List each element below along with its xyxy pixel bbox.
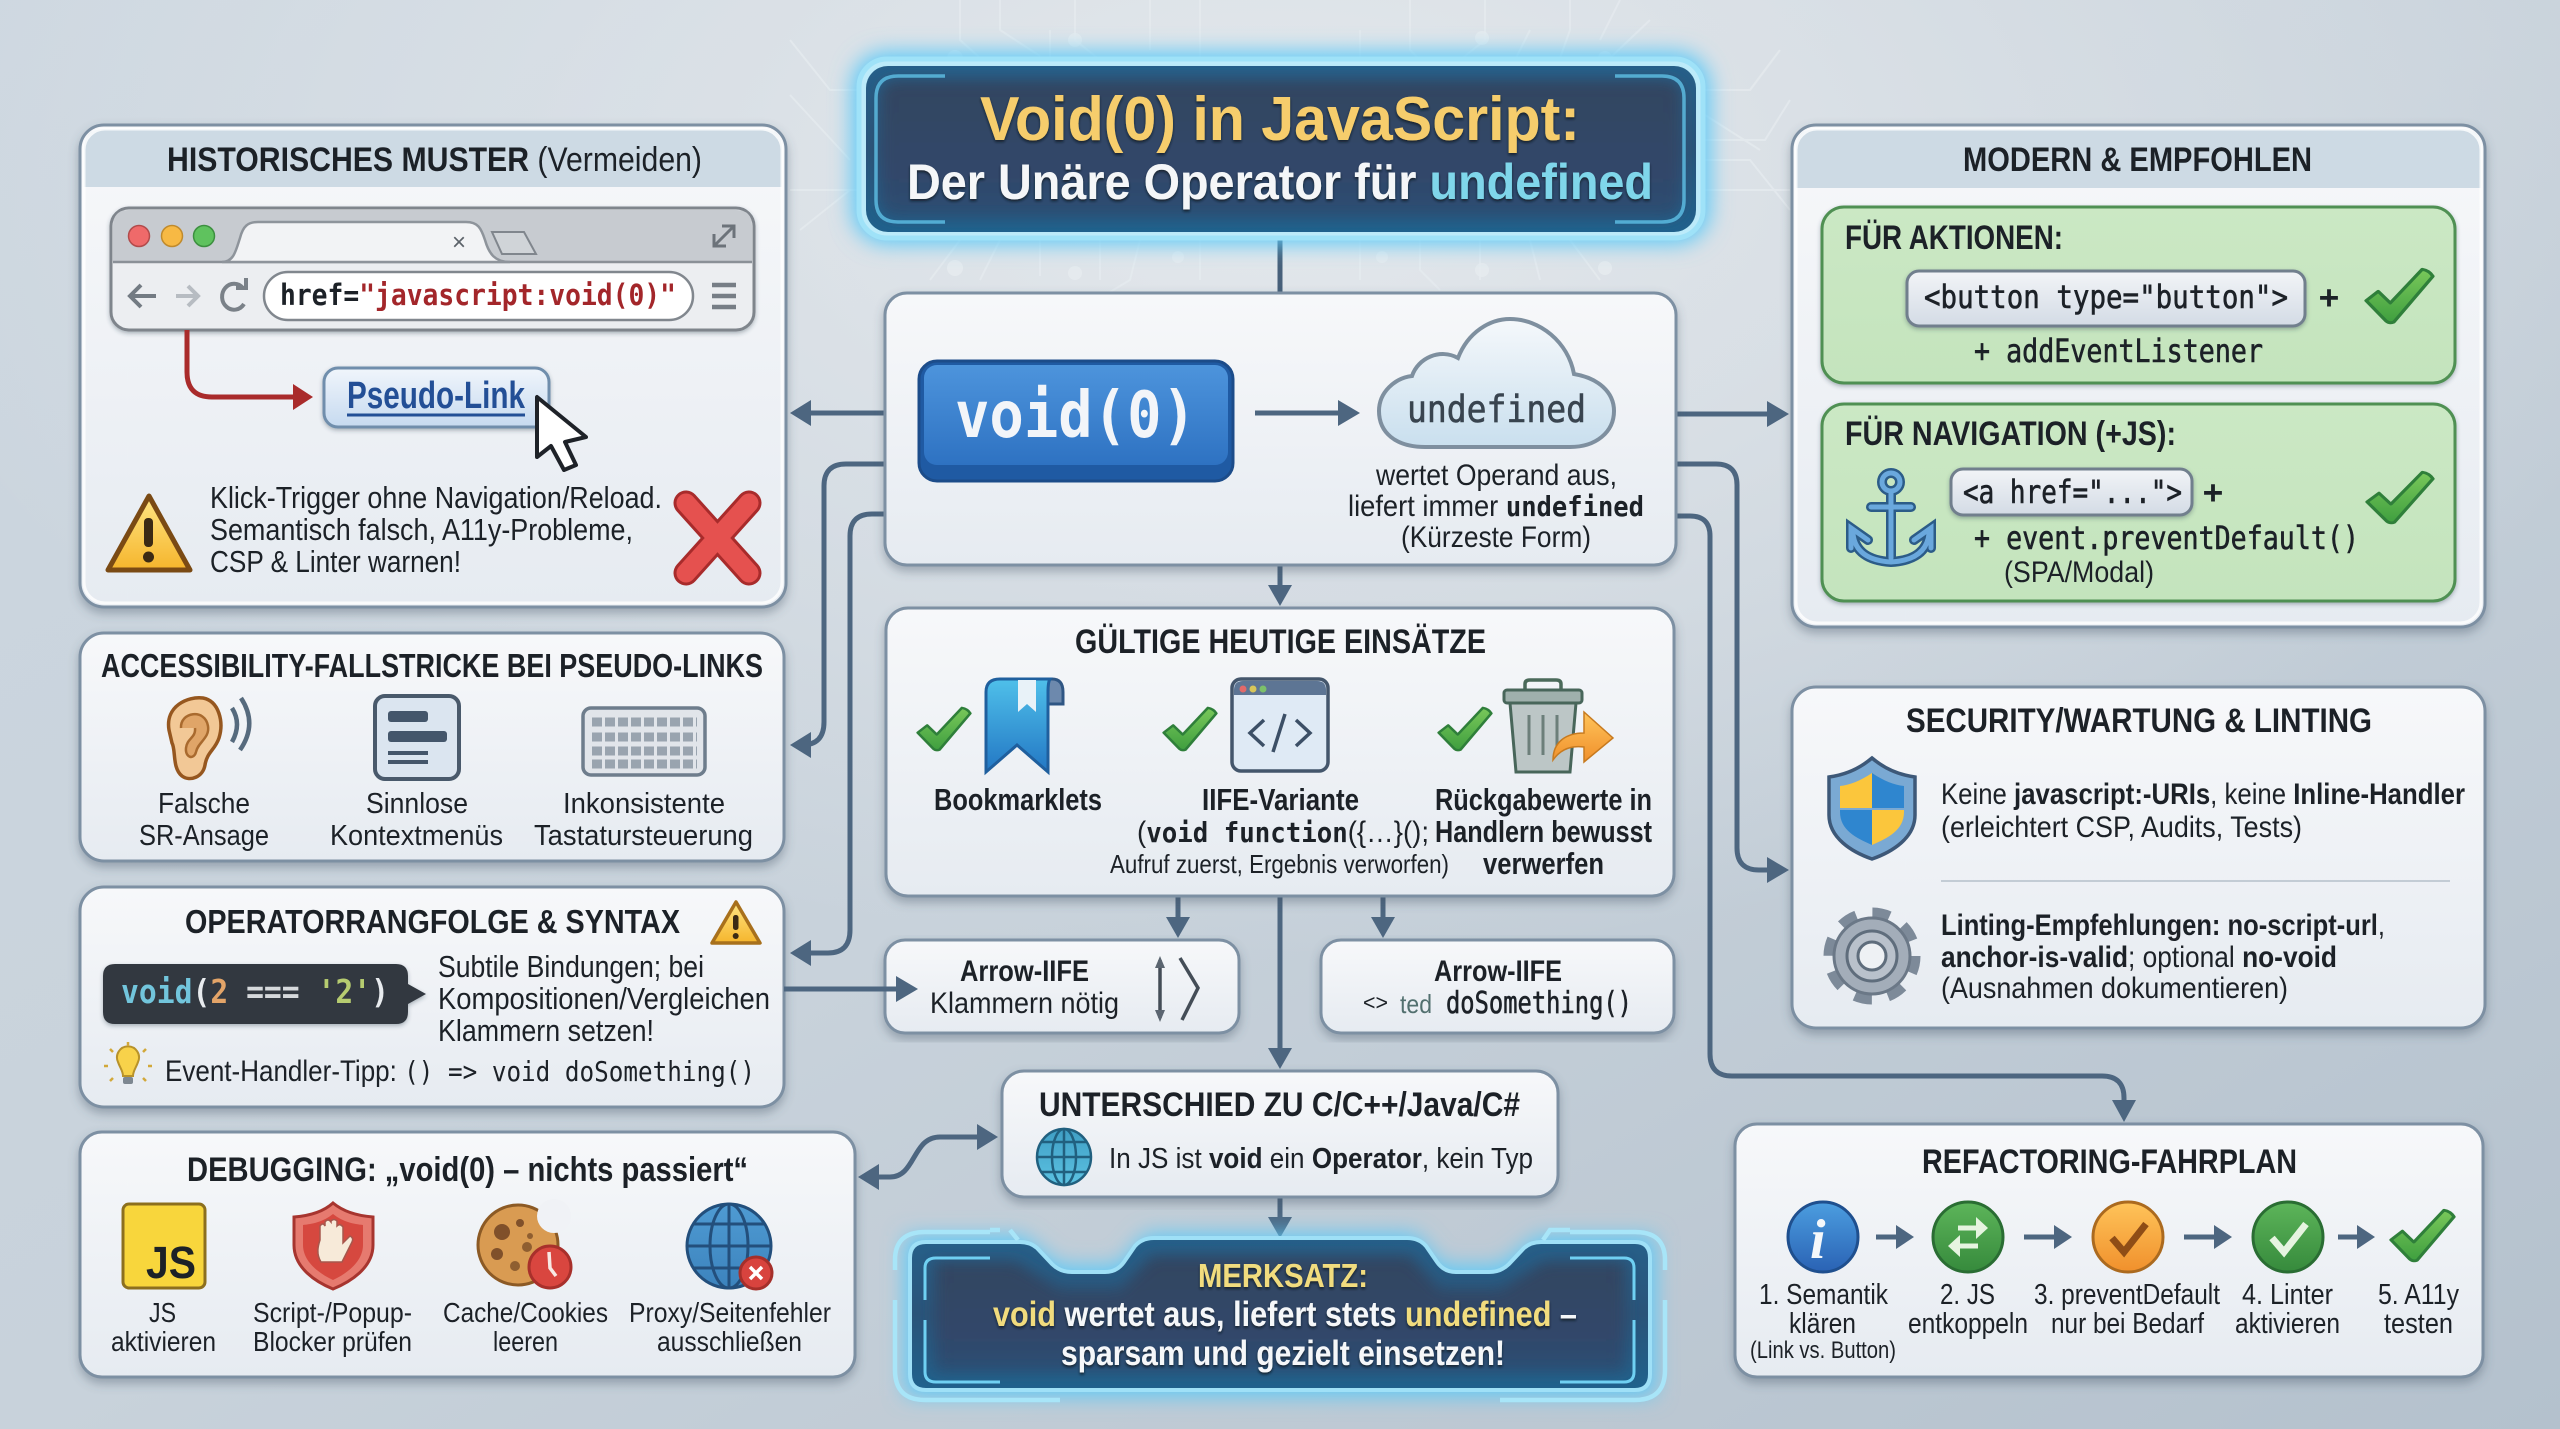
labels: aktivieren <box>111 1326 216 1357</box>
connector: core to valid uses <box>1268 565 1292 606</box>
connector: operator precedence to arrow iife <box>784 976 918 1002</box>
icon: light bulb <box>104 1042 152 1084</box>
panel: arrow iife right: <> <box>1363 990 1388 1015</box>
panel: arrow iife left <box>885 940 1239 1033</box>
labels: Proxy/Seitenfehler <box>629 1297 831 1328</box>
step labels: 3. preventDefault <box>2034 1279 2220 1311</box>
connector: core to refactoring <box>1676 516 2136 1122</box>
panel: historical pattern <box>80 125 786 607</box>
icon: blocker shield <box>294 1203 373 1289</box>
heading: DEBUGGING: „void(0) – nichts passiert“ <box>187 1151 748 1189</box>
warning text: Semantisch falsch, A11y-Probleme, <box>210 512 633 547</box>
panel: refactoring <box>1735 1124 2483 1377</box>
connector: valid uses to arrow iife left <box>1166 896 1190 938</box>
browser window: × <box>452 229 466 256</box>
green box: actions: FÜR AKTIONEN: <box>1845 219 2063 257</box>
icon: red cross <box>686 503 749 573</box>
panel: arrow iife right <box>1321 940 1674 1033</box>
pseudo-link button: Pseudo-Link <box>347 375 526 417</box>
security text: Keine javascript:-URIs, keine Inline-Handler <box>1941 778 2465 811</box>
connector: title to core <box>1278 238 1282 294</box>
icon: check 2 <box>1164 708 1216 750</box>
heading: HISTORISCHES MUSTER (Vermeiden) <box>167 141 702 179</box>
heading: ACCESSIBILITY-FALLSTRICKE BEI PSEUDO-LINKS <box>101 647 763 684</box>
void button <box>919 361 1233 481</box>
icon: keyboard <box>583 708 705 775</box>
connector: core to modern <box>1676 401 1789 427</box>
step labels: nur bei Bedarf <box>2051 1308 2205 1340</box>
labels: Blocker prüfen <box>253 1326 412 1357</box>
step labels: 2. JS <box>1940 1279 1995 1311</box>
step labels: entkoppeln <box>1908 1308 2028 1340</box>
labels: Script-/Popup- <box>253 1297 412 1328</box>
linting text <box>1941 909 2385 1005</box>
connector: comparison to merksatz <box>1268 1197 1292 1238</box>
panel: comparison <box>1002 1071 1558 1197</box>
connector: core to operator precedence <box>790 514 886 966</box>
icon: ear <box>169 698 249 779</box>
anchor code: <a href="..."> <box>1963 473 2182 511</box>
step 1 icon <box>1788 1202 1858 1272</box>
security text: (erleichtert CSP, Audits, Tests) <box>1941 811 2302 844</box>
labels <box>111 1297 831 1357</box>
red arrow <box>187 330 313 410</box>
core description: liefert immer undefined <box>1348 490 1644 523</box>
cloud undefined: undefined <box>1407 388 1586 431</box>
step arrow <box>2338 1225 2375 1249</box>
use labels: (void function({…}(); <box>1137 816 1429 849</box>
icon: shield <box>1829 758 1915 859</box>
code bubble <box>103 964 426 1024</box>
event handler tip: Event-Handler-Tipp: () => void doSomething() <box>165 1055 755 1088</box>
labels: Falsche <box>158 788 250 820</box>
icon: check <box>2367 472 2433 523</box>
panel: operator precedence <box>80 887 784 1107</box>
title line 1: Void(0) in JavaScript: <box>980 85 1580 154</box>
arrow to undefined <box>1255 400 1360 426</box>
step 5 icon <box>2391 1210 2454 1261</box>
icon: anchor <box>1851 473 1931 562</box>
panel: merksatz: void wertet aus, liefert stets undefined – <box>993 1295 1577 1334</box>
icon: globe with error <box>687 1204 772 1289</box>
panel: arrow iife left: Arrow-IIFE <box>960 955 1089 988</box>
icon: code window <box>1232 679 1328 771</box>
linting text: anchor-is-valid; optional no-void <box>1941 941 2337 974</box>
heading: REFACTORING-FAHRPLAN <box>1922 1143 2297 1181</box>
side text: Subtile Bindungen; bei <box>438 949 704 984</box>
panel: arrow iife right: doSomething() <box>1446 986 1632 1021</box>
icon: cookie <box>478 1199 571 1288</box>
icon: js: JS <box>146 1237 196 1288</box>
green box: navigation: (SPA/Modal) <box>2004 556 2154 589</box>
icon: js <box>123 1204 205 1288</box>
void button: void(0) <box>955 379 1196 453</box>
icon: parentheses <box>1155 956 1198 1022</box>
connector: valid uses to arrow iife right <box>1371 896 1395 938</box>
step labels: aktivieren <box>2235 1308 2340 1340</box>
heading: GÜLTIGE HEUTIGE EINSÄTZE <box>1075 623 1486 661</box>
panel: valid uses <box>886 608 1674 896</box>
icon: warning <box>108 496 190 570</box>
green box: actions: + addEventListener <box>1974 332 2263 370</box>
connector: valid uses to comparison <box>1268 896 1292 1069</box>
icon: bookmark <box>986 679 1063 772</box>
address bar code: href="javascript:void(0)" <box>280 278 676 312</box>
use labels <box>934 782 1652 881</box>
use labels: Bookmarklets <box>934 782 1102 817</box>
use labels: verwerfen <box>1483 846 1604 881</box>
panel: debugging <box>80 1132 855 1377</box>
icon: check 3 <box>1439 708 1491 750</box>
heading: UNTERSCHIED ZU C/C++/Java/C# <box>1039 1086 1520 1124</box>
icon: context menu <box>375 696 459 779</box>
connector: core to security <box>1676 464 1789 883</box>
labels <box>139 788 753 852</box>
title banner <box>852 52 1710 244</box>
button code <box>1907 271 2305 326</box>
pseudo-link button <box>324 368 549 427</box>
step arrow <box>1876 1225 1914 1249</box>
step arrow <box>2184 1225 2232 1249</box>
side text: Klammern setzen! <box>438 1013 654 1048</box>
title line 2: Der Unäre Operator für undefined <box>907 154 1653 210</box>
panel: merksatz: sparsam und gezielt einsetzen! <box>1061 1334 1505 1373</box>
core description: (Kürzeste Form) <box>1401 521 1591 554</box>
step labels: 5. A11y <box>2378 1279 2459 1311</box>
browser window <box>111 208 754 330</box>
step 2 icon <box>1933 1202 2003 1272</box>
icon: trash with arrow <box>1504 680 1613 772</box>
labels: ausschließen <box>657 1326 802 1357</box>
panel: arrow iife left: Klammern nötig <box>930 987 1119 1020</box>
step labels: testen <box>2384 1308 2453 1340</box>
step labels: 4. Linter <box>2242 1279 2333 1311</box>
step arrow <box>2024 1225 2072 1249</box>
security text <box>1941 778 2465 844</box>
icon: warning <box>712 902 760 943</box>
panel: arrow iife right: Arrow-IIFE <box>1434 955 1562 988</box>
icon: globe <box>1037 1129 1091 1185</box>
heading: SECURITY/WARTUNG & LINTING <box>1906 702 2372 740</box>
linting text: (Ausnahmen dokumentieren) <box>1941 972 2288 1005</box>
connector: core to accessibility <box>790 464 886 758</box>
button code: <button type="button"> <box>1924 278 2288 316</box>
linting text: Linting-Empfehlungen: no-script-url, <box>1941 909 2385 942</box>
icon: gear <box>1830 914 1914 998</box>
icon: cursor <box>537 397 586 470</box>
step labels: 1. Semantik <box>1759 1279 1888 1311</box>
warning text <box>210 480 662 579</box>
labels: Tastatursteuerung <box>534 820 753 852</box>
anchor code <box>1951 469 2192 515</box>
merksatz text: MERKSATZ: <box>1198 1257 1368 1294</box>
side text <box>438 949 770 1048</box>
step labels: (Link vs. Button) <box>1750 1337 1896 1364</box>
green box: navigation <box>1822 404 2455 601</box>
labels: Cache/Cookies <box>443 1297 608 1328</box>
panel: accessibility <box>80 633 784 861</box>
connector: debugging and comparison double arrow <box>858 1124 998 1190</box>
step 3 icon <box>2093 1202 2163 1272</box>
connector: core to historical pattern <box>790 400 886 426</box>
use labels: Rückgabewerte in <box>1435 782 1652 817</box>
core description: wertet Operand aus, <box>1375 459 1617 492</box>
heading: OPERATORRANGFOLGE & SYNTAX <box>185 903 680 940</box>
icon: check <box>2366 269 2433 323</box>
panel: core void(0) <box>885 293 1676 565</box>
labels: leeren <box>493 1326 558 1357</box>
circuit pattern <box>790 0 1790 292</box>
use labels: Handlern bewusst <box>1435 814 1652 849</box>
use labels: IIFE-Variante <box>1202 782 1359 817</box>
cloud undefined <box>1379 319 1614 447</box>
step 1 icon: i <box>1810 1209 1826 1271</box>
green box: actions <box>1822 207 2455 383</box>
panel: security <box>1792 687 2485 1028</box>
labels: SR-Ansage <box>139 820 269 852</box>
labels: Inkonsistente <box>563 788 725 820</box>
panel: modern <box>1792 125 2485 627</box>
step 4 icon <box>2253 1202 2323 1272</box>
icon: check 1 <box>918 708 970 750</box>
warning text: Klick-Trigger ohne Navigation/Reload. <box>210 480 662 515</box>
core description <box>1348 459 1644 554</box>
panel: merksatz <box>895 1230 1665 1400</box>
green box: navigation: + <box>2203 473 2223 511</box>
step labels <box>1750 1279 2459 1364</box>
step labels: klären <box>1789 1308 1856 1340</box>
labels: Sinnlose <box>366 788 468 820</box>
labels: JS <box>149 1297 176 1328</box>
warning text: CSP & Linter warnen! <box>210 544 461 579</box>
code bubble: void(2 === '2') <box>121 972 389 1011</box>
comparison text: In JS ist void ein Operator, kein Typ <box>1109 1143 1533 1175</box>
heading: MODERN & EMPFOHLEN <box>1963 141 2312 179</box>
side text: Kompositionen/Vergleichen <box>438 981 770 1016</box>
panel: arrow iife right: ted <box>1400 989 1432 1019</box>
green box: navigation: + event.preventDefault() <box>1974 519 2359 557</box>
green box: actions: + <box>2319 278 2339 316</box>
labels: Kontextmenüs <box>330 820 503 852</box>
use labels: Aufruf zuerst, Ergebnis verworfen) <box>1110 849 1449 879</box>
green box: navigation: FÜR NAVIGATION (+JS): <box>1845 415 2176 453</box>
